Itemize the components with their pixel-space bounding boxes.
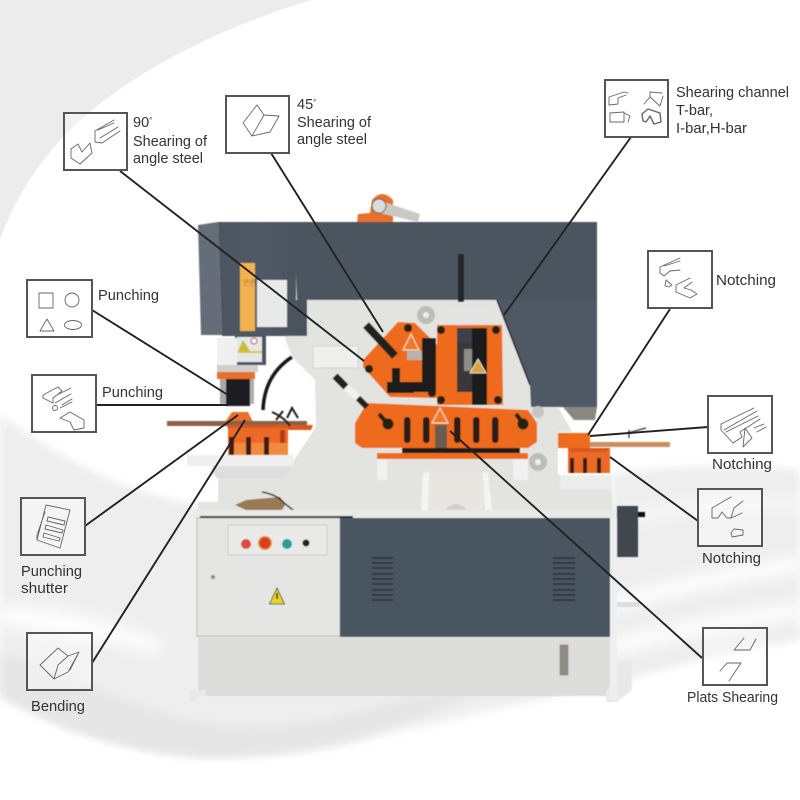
label: 45 degree: Shearing of [297, 115, 372, 131]
callout: punching parts [32, 375, 163, 432]
bottle on base [235, 492, 293, 510]
top gauge wheel [417, 306, 435, 324]
callout: punching shutter [21, 498, 85, 597]
label: notching: Notching [702, 551, 761, 567]
label: punching: Punching [102, 385, 163, 401]
door lock [211, 575, 215, 579]
icon: notched channel [721, 408, 766, 447]
label: channel: Shearing channel [676, 85, 789, 101]
icon: punching shapes [39, 293, 82, 331]
shear blade tool [387, 338, 436, 393]
callout: notching right [708, 396, 772, 473]
callout: punching shutter: shutter [21, 581, 68, 597]
callout: punching shapes [27, 280, 159, 337]
icon: shutter [37, 505, 70, 548]
white block [450, 310, 490, 321]
label: 45 degree: angle steel [297, 132, 367, 148]
icon: plate cuts [720, 638, 756, 681]
central recess [421, 472, 492, 510]
label: notching: Notching [712, 457, 772, 473]
icon: notched angle [660, 258, 697, 298]
upper main hood [294, 222, 597, 300]
icon: profiles [609, 92, 663, 124]
small sticker box [235, 335, 266, 365]
side shelf [617, 602, 640, 607]
upper right orange guard [437, 325, 503, 405]
top lever [357, 194, 420, 222]
data plate [313, 346, 358, 368]
hydraulic hose [263, 357, 292, 410]
left foot [190, 690, 206, 702]
tool handle rod [458, 254, 464, 302]
right foot [606, 660, 632, 702]
left tray support [212, 466, 290, 478]
left punch table [167, 408, 313, 455]
left arm handle [335, 376, 367, 407]
hood right panel [497, 299, 597, 407]
callout: 45 degree shearing of angle steel [226, 96, 372, 153]
label: 90 degree: Shearing of [133, 134, 208, 150]
right tray [560, 475, 612, 490]
handle [366, 325, 395, 356]
upper housing front [218, 222, 307, 336]
label: plats shearing: Plats Shearing [687, 690, 778, 706]
label: notching: Notching [716, 273, 776, 289]
machine [167, 194, 670, 702]
foot switch box [617, 506, 645, 557]
callout: bending [27, 633, 92, 715]
warning triangle [403, 334, 419, 350]
right pillar [610, 518, 617, 700]
control cabinet door [197, 518, 340, 636]
yellow warning label [240, 263, 256, 331]
callout: shearing channel: T-bar, [676, 103, 713, 119]
label: 45 degree: ° [313, 98, 316, 107]
left side of upper housing [198, 222, 222, 335]
control panel [228, 525, 327, 555]
dark cabinet door with vents [340, 518, 610, 637]
lower orange strip [377, 453, 528, 459]
icon: channel [712, 497, 743, 537]
label: 90 degree: 90 [133, 115, 149, 131]
label: 45 degree: 45 [297, 97, 313, 113]
label: punching shutter: Punching [21, 564, 82, 580]
warning triangle [270, 588, 284, 604]
base top rail [195, 510, 615, 518]
white brackets [377, 406, 547, 480]
callout: notching top [648, 251, 776, 308]
left tray [187, 455, 293, 466]
right notching station [558, 428, 670, 473]
machine body frame [198, 298, 614, 702]
label: 90 degree: ° [149, 116, 152, 125]
yellow warning label: 안전 [243, 278, 256, 287]
black door top edge [200, 516, 353, 518]
callout: plates shearing [687, 628, 778, 706]
label: punching: Punching [98, 288, 159, 304]
upper left orange guard [363, 322, 437, 398]
leader lines [85, 137, 708, 663]
white instruction sheet [257, 280, 287, 327]
lower orange shear bar [355, 403, 537, 448]
right wedge under hood [563, 407, 597, 420]
callout: shearing channel [605, 80, 789, 137]
punch column [217, 338, 258, 406]
icon: bent plate [40, 648, 79, 679]
callout: shearing channel: I-bar,H-bar [676, 121, 747, 137]
callout: notching middle [698, 489, 762, 567]
lower base panel [198, 638, 610, 696]
icon: angle steel [71, 120, 120, 164]
callout: 90 degree shearing of angle steel [64, 113, 208, 170]
label: 90 degree: angle steel [133, 151, 203, 167]
icon: angle [243, 105, 279, 136]
label: bending: Bending [31, 699, 85, 715]
hood seam [497, 300, 530, 385]
icon: punched plate [43, 387, 84, 430]
black knife strip [402, 448, 520, 453]
